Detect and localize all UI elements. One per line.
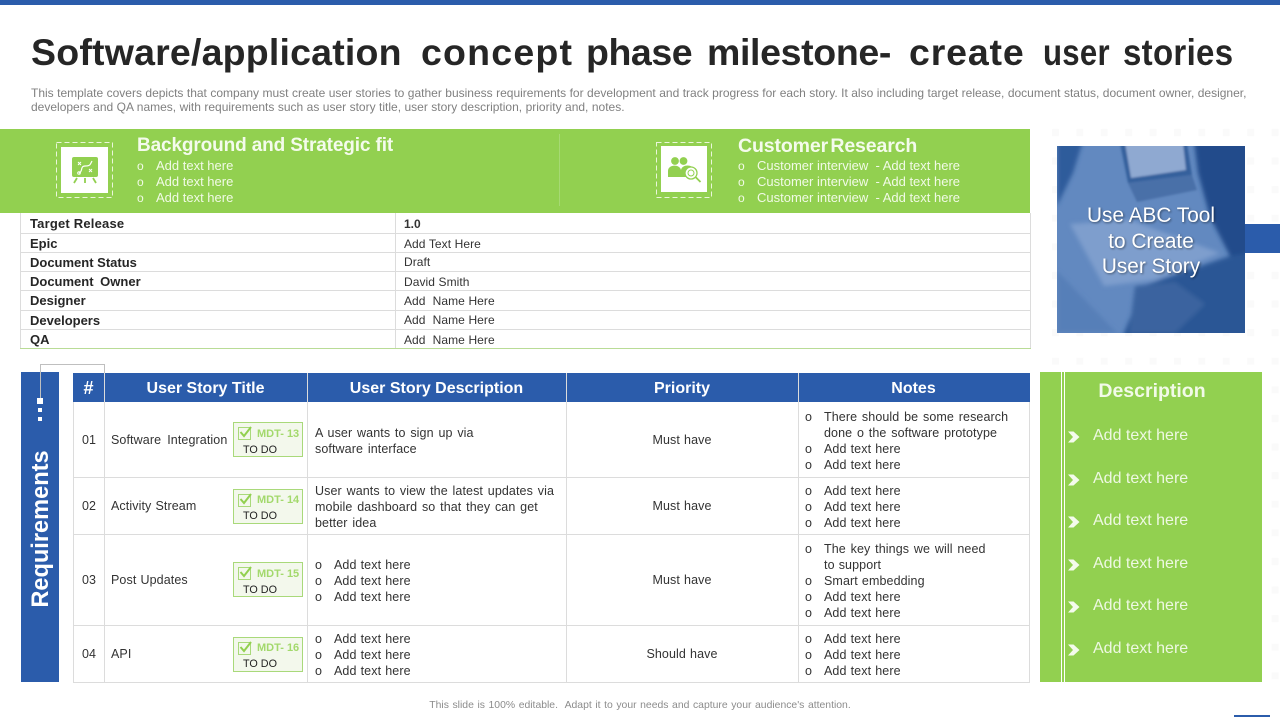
description list: Add text here	[1093, 427, 1188, 444]
bullet list: background: Add text here	[156, 190, 233, 205]
requirements table: #	[83, 378, 94, 398]
requirements table: Add text here	[334, 574, 411, 588]
requirements table: mobile dashboard so that they can get	[315, 500, 538, 514]
requirements table: o	[805, 632, 812, 646]
bullet list: customer research	[738, 158, 960, 205]
requirements side panel	[21, 372, 59, 682]
metadata table: 1.0	[404, 217, 421, 231]
tag MDT-14: MDT- 14	[257, 494, 299, 506]
bullet list: background: o	[137, 159, 144, 173]
heading: customer research: Customer Research	[738, 135, 917, 157]
bullet list: background: o	[137, 191, 144, 205]
tag MDT-16: MDT- 16	[257, 642, 299, 654]
requirements table: User wants to view the latest updates via	[315, 484, 554, 498]
requirements table: Add text here	[334, 590, 411, 604]
requirements label: Requirements	[28, 450, 54, 608]
requirements table: Post Updates	[111, 573, 188, 587]
background dots	[1040, 125, 1280, 685]
tag MDT-14	[233, 489, 303, 524]
requirements table: API	[111, 647, 131, 661]
requirements table	[73, 373, 1030, 683]
tag MDT-13: TO DO	[243, 444, 277, 456]
metadata table: QA	[30, 332, 50, 347]
metadata table: Document Owner	[30, 274, 141, 289]
requirements table: Add text here	[824, 606, 901, 620]
requirements table: Software Integration	[111, 433, 227, 447]
metadata table: Add Name Here	[404, 313, 495, 327]
row 02: 02	[82, 499, 96, 513]
photo caption	[1087, 204, 1216, 280]
double rule	[1061, 372, 1062, 682]
tag MDT-15: TO DO	[243, 584, 277, 596]
requirements table: o	[315, 558, 322, 572]
banner divider	[559, 134, 560, 206]
metadata table: Add Name Here	[404, 294, 495, 308]
photo caption: User Story	[1102, 255, 1200, 278]
description list: Add text here	[1093, 555, 1188, 572]
requirements table: Add text here	[824, 632, 901, 646]
description list	[1068, 427, 1188, 657]
row 03: 03	[82, 573, 96, 587]
metadata table: Designer	[30, 293, 86, 308]
requirements table: done o the software prototype	[824, 426, 997, 440]
intro text	[31, 86, 1246, 114]
requirements table: o	[315, 632, 322, 646]
requirements table: Add text here	[824, 500, 901, 514]
title: create	[909, 31, 1025, 73]
title: concept	[421, 31, 573, 73]
requirements table: Add text here	[824, 648, 901, 662]
tag MDT-13: MDT- 13	[257, 428, 299, 440]
footer note: This slide is 100% editable. Adapt it to your needs and capture your audience's attention.	[429, 700, 851, 711]
metadata table: Target Release	[30, 216, 124, 231]
bullet list: background	[137, 158, 233, 205]
requirements table: o	[805, 484, 812, 498]
title: Software/application	[31, 31, 402, 73]
requirements table: o	[805, 648, 812, 662]
bullet list: customer research: o	[738, 191, 745, 205]
requirements table: o	[805, 442, 812, 456]
requirements table: Must have	[652, 499, 712, 513]
requirements table: User Story Title	[147, 380, 264, 397]
bullet list: background: Add text here	[156, 158, 233, 173]
row 01: 01	[82, 433, 96, 447]
bullet list: background: Add text here	[156, 174, 233, 189]
metadata table: Epic	[30, 236, 57, 251]
requirements table: o	[805, 500, 812, 514]
blue side tab	[1245, 224, 1280, 253]
requirements table: o	[805, 458, 812, 472]
requirements table: o	[315, 590, 322, 604]
requirements table: Add text here	[334, 558, 411, 572]
description panel	[1040, 372, 1262, 682]
requirements table: Add text here	[824, 484, 901, 498]
tag MDT-15	[233, 562, 303, 597]
requirements table: Add text here	[334, 648, 411, 662]
requirements table: o	[805, 606, 812, 620]
bullet list: customer research: o	[738, 159, 745, 173]
heading: background and strategic fit: Background and Strategic fit	[137, 135, 393, 156]
description list: Add text here	[1093, 512, 1188, 529]
icon: strategy board	[56, 142, 113, 198]
title: milestone-	[707, 31, 891, 73]
tag MDT-15: MDT- 15	[257, 568, 299, 580]
requirements table: The key things we will need	[824, 542, 986, 556]
requirements table: o	[805, 590, 812, 604]
requirements table: Activity Stream	[111, 499, 196, 513]
requirements table: Priority	[654, 380, 710, 397]
bullet list: customer research: Customer interview - Add text here	[757, 190, 960, 205]
requirements table: There should be some research	[824, 410, 1008, 424]
requirements table: software interface	[315, 442, 417, 456]
requirements table: Add text here	[824, 516, 901, 530]
requirements table: Add text here	[824, 590, 901, 604]
requirements table: o	[315, 574, 322, 588]
requirements table: o	[315, 648, 322, 662]
intro text: developers and QA names, with requirements such as user story title, user story description, priority and, notes.	[31, 100, 625, 114]
metadata table: Developers	[30, 313, 100, 328]
tag MDT-16: TO DO	[243, 658, 277, 670]
metadata table: Draft	[404, 255, 430, 269]
photo caption: Use ABC Tool	[1087, 204, 1215, 227]
icon: customer research	[656, 142, 712, 198]
requirements table: User Story Description	[350, 380, 523, 397]
intro text: This template covers depicts that company must create user stories to gather business requirements for development and track progress for each story. It also including target release, document status, document owner, designer,	[31, 86, 1246, 100]
requirements table: o	[805, 574, 812, 588]
requirements table: o	[315, 664, 322, 678]
green banner	[0, 129, 1030, 213]
title: stories	[1123, 31, 1233, 73]
table header	[73, 373, 1030, 402]
requirements table: Smart embedding	[824, 574, 925, 588]
requirements table: Add text here	[824, 458, 901, 472]
bullet list: customer research: o	[738, 175, 745, 189]
bullet list: background: o	[137, 175, 144, 189]
description heading: Description	[1098, 380, 1206, 402]
photo caption: to Create	[1108, 230, 1194, 252]
requirements table: o	[805, 542, 812, 556]
bullet list: customer research: Customer interview - Add text here	[757, 158, 960, 173]
metadata table: David Smith	[404, 275, 469, 289]
bracket line	[40, 364, 105, 398]
title: user	[1043, 31, 1110, 73]
requirements table: Notes	[891, 380, 936, 397]
requirements table: Add text here	[334, 664, 411, 678]
requirements table: Add text here	[824, 442, 901, 456]
requirements table: Add text here	[824, 664, 901, 678]
requirements table: Add text here	[334, 632, 411, 646]
requirements table: o	[805, 516, 812, 530]
title	[31, 31, 1233, 73]
tag MDT-13	[233, 422, 303, 457]
description list: Add text here	[1093, 470, 1188, 487]
bullet list: customer research: Customer interview - Add text here	[757, 174, 960, 189]
dots	[37, 398, 43, 404]
description list: Add text here	[1093, 640, 1188, 657]
description list: Add text here	[1093, 597, 1188, 614]
photo texture	[1057, 146, 1245, 333]
metadata table	[20, 213, 1031, 349]
tag MDT-14: TO DO	[243, 510, 277, 522]
requirements table: Must have	[652, 433, 712, 447]
requirements table: Must have	[652, 573, 712, 587]
requirements table: Should have	[646, 647, 718, 661]
title: phase	[586, 31, 692, 73]
requirements table: o	[805, 410, 812, 424]
requirements table: o	[805, 664, 812, 678]
photo panel: use ABC tool	[1057, 146, 1245, 333]
requirements table: better idea	[315, 516, 376, 530]
metadata table: Add Name Here	[404, 333, 495, 347]
metadata table: Add Text Here	[404, 237, 481, 251]
row 04: 04	[82, 647, 96, 661]
metadata table: Document Status	[30, 255, 137, 270]
requirements table: to support	[824, 558, 881, 572]
top accent bar	[0, 0, 1280, 5]
tag MDT-16	[233, 637, 303, 672]
requirements table: A user wants to sign up via	[315, 426, 474, 440]
page marker	[1234, 715, 1270, 717]
